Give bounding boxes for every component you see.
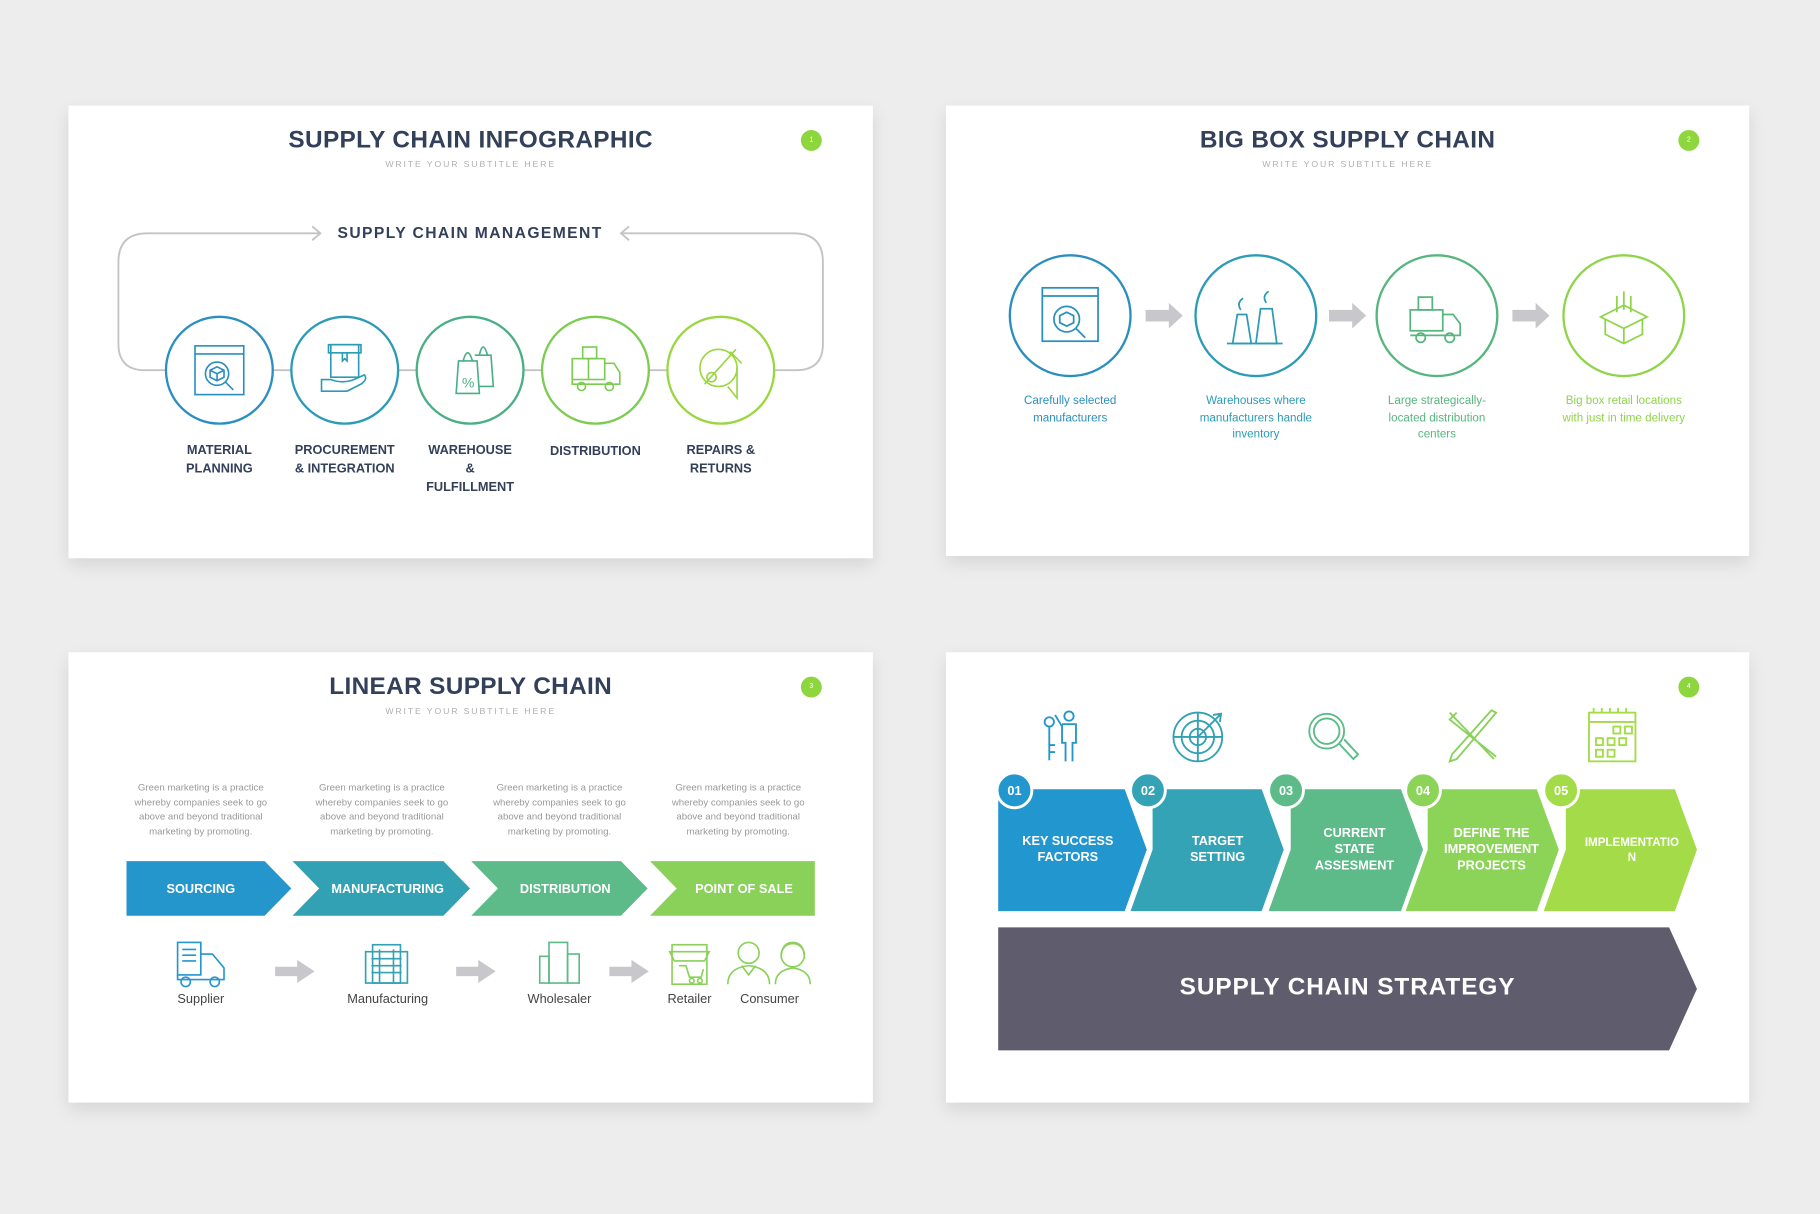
heading: supply chain management: SUPPLY CHAIN MANAGEMENT	[337, 225, 603, 242]
names: Supplier	[177, 992, 224, 1006]
panel: supply chain infographic: & INTEGRATION	[295, 462, 395, 476]
panel: linear supply chain	[68, 652, 873, 1103]
panel: supply chain strategy: STATE	[1335, 841, 1375, 856]
icons: %	[462, 375, 474, 391]
panel: big box supply chain: Warehouses where	[1206, 395, 1306, 407]
panel: supply chain strategy: SUPPLY CHAIN STRATEGY	[1180, 974, 1515, 1001]
labels: PLANNING	[186, 462, 253, 476]
title: LINEAR SUPPLY CHAIN	[329, 673, 612, 700]
panel: supply chain strategy: SETTING	[1190, 849, 1245, 864]
badge	[1678, 130, 1699, 151]
loop diagram	[118, 225, 824, 425]
chevron bar and icons: DISTRIBUTION	[520, 881, 611, 896]
panel: supply chain strategy: 04	[1416, 783, 1431, 798]
panel: supply chain strategy: ASSESMENT	[1315, 857, 1394, 872]
title: BIG BOX SUPPLY CHAIN	[1200, 127, 1495, 153]
panel: supply chain strategy: FACTORS	[1038, 849, 1098, 864]
circles	[166, 317, 774, 424]
panel: supply chain strategy: N	[1628, 851, 1636, 864]
captions: manufacturers	[1033, 411, 1107, 424]
badge: 2	[1687, 137, 1691, 144]
panel: supply chain strategy: IMPLEMENTATIO	[1585, 836, 1679, 849]
panel: linear supply chain: Manufacturing	[347, 992, 428, 1006]
panel: supply chain infographic: &	[465, 462, 475, 476]
icons	[1042, 288, 1647, 344]
chevron bar and icons: SOURCING	[166, 881, 235, 896]
chevron bar and icons	[126, 861, 815, 988]
panel: supply chain strategy: 02	[1141, 783, 1155, 798]
panel: linear supply chain: Green marketing is a practice whereby companies seek to go above and beyond traditional marketing by promoting.	[672, 781, 805, 836]
badge	[1678, 677, 1699, 698]
panel: big box supply chain: with just in time delivery	[1563, 411, 1685, 424]
icons row	[1045, 708, 1635, 761]
badge	[801, 677, 822, 698]
title: SUPPLY CHAIN INFOGRAPHIC	[288, 127, 653, 153]
panel: big box supply chain: Large strategically-	[1388, 395, 1486, 407]
paragraphs: Green marketing is a practice whereby companies seek to go above and beyond traditional marketing by promoting.	[134, 781, 267, 836]
badge	[801, 130, 822, 151]
captions	[1024, 395, 1116, 424]
panel: linear supply chain: Green marketing is a practice whereby companies seek to go above and beyond traditional marketing by promoting.	[493, 781, 626, 836]
loop arrows	[118, 226, 823, 370]
subtitle: WRITE YOUR SUBTITLE HERE	[385, 706, 556, 716]
badge: 1	[809, 137, 813, 144]
panel: supply chain strategy: 03	[1279, 783, 1293, 798]
panel: supply chain strategy: 01	[1007, 783, 1022, 798]
panel: supply chain strategy: TARGET	[1192, 833, 1244, 848]
arrows	[1146, 303, 1550, 328]
chevron bar and icons: MANUFACTURING	[331, 881, 444, 896]
panel: big box supply chain: Big box retail locations	[1566, 395, 1682, 407]
subtitle: WRITE YOUR SUBTITLE HERE	[1262, 159, 1433, 169]
labels	[186, 443, 253, 476]
panel: linear supply chain: Wholesaler	[528, 992, 591, 1006]
panel: supply chain infographic: REPAIRS &	[687, 443, 755, 457]
strategy bar	[998, 927, 1697, 1050]
icons	[178, 942, 810, 987]
panel: supply chain strategy: CURRENT	[1323, 825, 1386, 840]
panel: big box supply chain: located distribution	[1389, 411, 1485, 424]
panel: linear supply chain: Consumer	[740, 992, 799, 1006]
panel: big box supply chain: inventory	[1232, 428, 1279, 441]
labels: MATERIAL	[187, 443, 252, 457]
panel: big box supply chain: manufacturers handle	[1200, 411, 1312, 424]
panel: supply chain infographic	[68, 106, 873, 558]
panel: linear supply chain: Retailer	[667, 992, 711, 1006]
panel: supply chain strategy: IMPROVEMENT	[1444, 841, 1539, 856]
gray arrows	[275, 960, 649, 983]
panel: supply chain strategy: PROJECTS	[1457, 857, 1526, 872]
panel: supply chain infographic: PROCUREMENT	[295, 443, 395, 457]
icons	[195, 345, 742, 398]
captions: Carefully selected	[1024, 395, 1116, 407]
panel: supply chain infographic: WAREHOUSE	[428, 443, 512, 457]
chevron bar and icons: POINT OF SALE	[695, 881, 793, 896]
badge: 3	[809, 684, 813, 691]
panel: linear supply chain: Green marketing is a practice whereby companies seek to go above and beyond traditional marketing by promoting.	[315, 781, 448, 836]
panel: supply chain strategy: KEY SUCCESS	[1022, 833, 1113, 848]
panel: supply chain strategy	[946, 652, 1749, 1103]
panel: supply chain strategy: 05	[1554, 783, 1568, 798]
number badges	[997, 773, 1579, 808]
panel: big box supply chain	[946, 106, 1749, 556]
panel: supply chain infographic: RETURNS	[690, 462, 752, 476]
badge: 4	[1687, 684, 1691, 691]
panel: supply chain strategy: DEFINE THE	[1454, 825, 1529, 840]
panel: supply chain infographic: DISTRIBUTION	[550, 445, 641, 458]
subtitle: WRITE YOUR SUBTITLE HERE	[385, 159, 556, 169]
panel: supply chain infographic: FULFILLMENT	[426, 480, 514, 494]
panel: big box supply chain: centers	[1418, 428, 1456, 441]
step chevrons	[998, 789, 1697, 911]
process circles	[1008, 254, 1686, 378]
